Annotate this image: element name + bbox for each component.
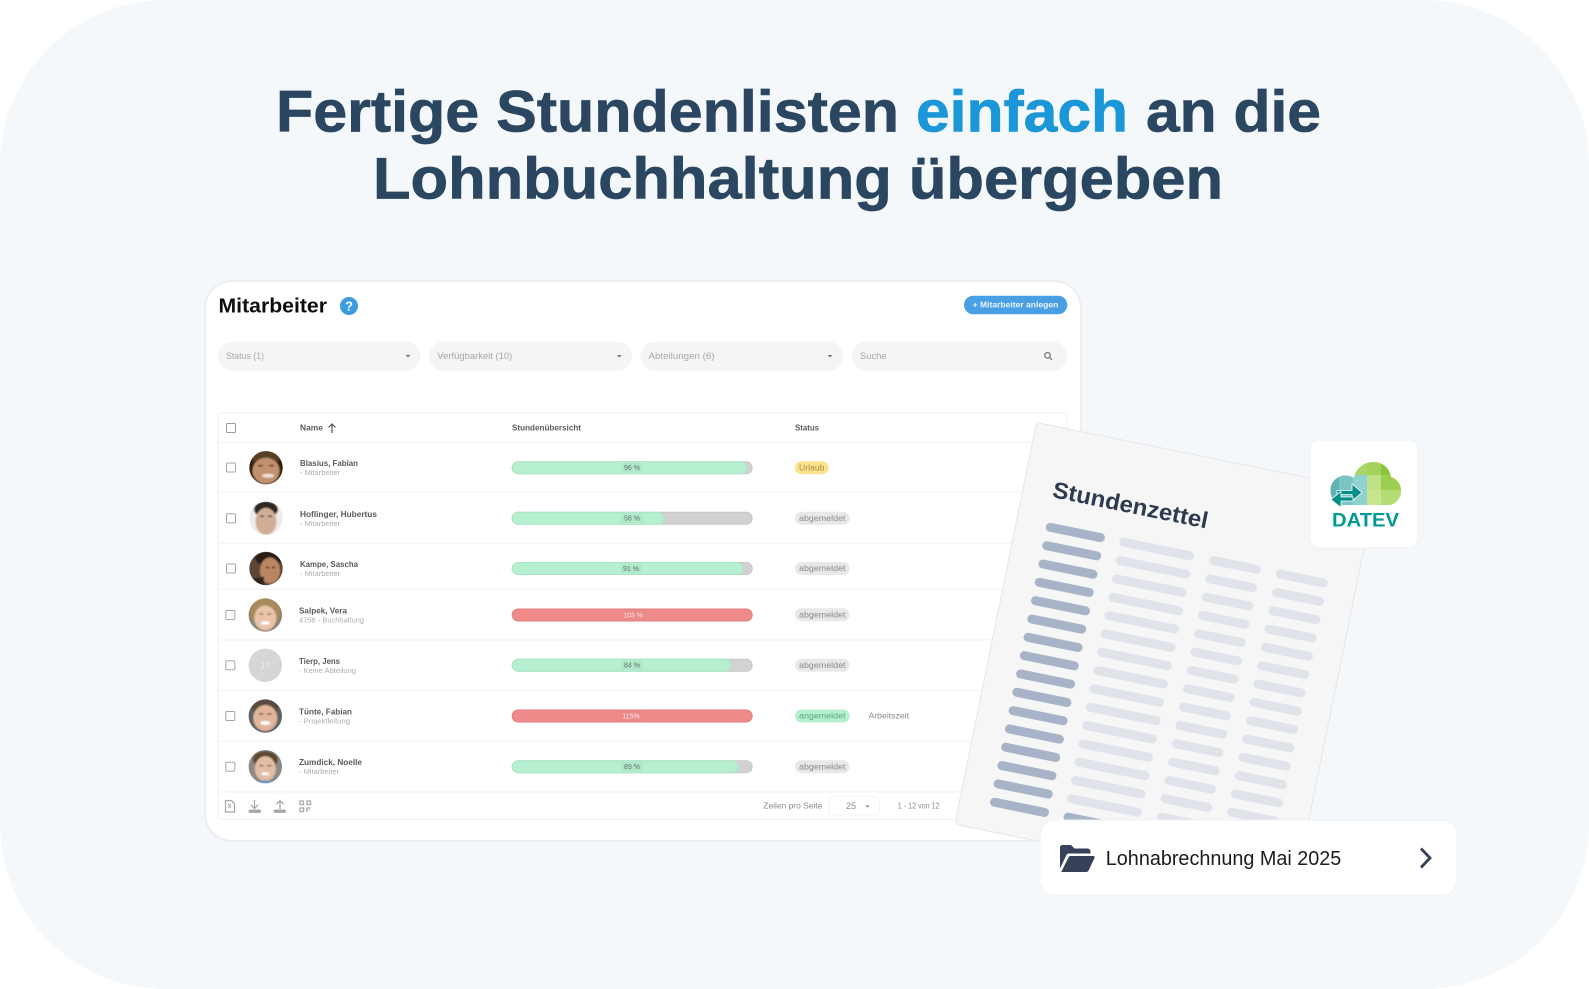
icon: DATEV cloud <box>1330 462 1401 507</box>
filter: Suche: Suche <box>860 351 887 361</box>
pagination: 25 <box>846 801 856 812</box>
row: Salpek, Vera: 4758 - Buchhaltung <box>299 618 364 624</box>
DATEV wordmark: DATEV <box>1332 511 1399 532</box>
icon: chevron <box>1421 848 1430 868</box>
row: Tierp, Jens: Tierp, Jens <box>299 657 341 666</box>
button: Mitarbeiter anlegen: + Mitarbeiter anlegen <box>973 300 1058 310</box>
name column bars <box>989 522 1106 818</box>
row: Blasius, Fabian: Blasius, Fabian <box>300 459 358 468</box>
filter: Verfügbarkeit <box>429 342 632 371</box>
row: Tünte, Fabian: 115% <box>622 713 640 720</box>
row: Zumdick, Noelle: abgemeldet <box>799 762 846 771</box>
row: Hoflinger, Hubertus: 58 % <box>624 516 640 523</box>
row: Blasius, Fabian: - Mitarbeiter <box>300 470 341 477</box>
avatar: Tierp initials: JT <box>260 661 271 672</box>
avatar: Salpek <box>248 598 282 632</box>
filter: Abteilungen <box>640 342 843 371</box>
row: Zumdick, Noelle: Zumdick, Noelle <box>299 758 363 767</box>
row: Hoflinger, Hubertus: Hoflinger, Hubertus <box>300 510 378 519</box>
icon: help <box>340 297 358 315</box>
row: Kampe, Sascha: Kampe, Sascha <box>300 560 359 569</box>
row: Salpek, Vera: 103 % <box>623 612 643 619</box>
card label: Lohnabrechnung Mai 2025 <box>1106 848 1341 870</box>
row: Zumdick, Noelle: 89 % <box>624 764 640 771</box>
row: Tünte, Fabian: - Projektleitung <box>299 718 350 726</box>
avatar: Tünte <box>248 699 282 733</box>
table header <box>226 424 820 433</box>
panel: Stundenzettel paper sheet <box>955 423 1376 893</box>
row: Salpek, Vera: Salpek, Vera <box>299 606 348 616</box>
avatar: Tierp initials <box>249 649 282 682</box>
row: Kampe, Sascha: 91 % <box>623 566 639 573</box>
avatar: Kampe <box>249 552 283 586</box>
title <box>276 80 1321 212</box>
row: Zumdick, Noelle <box>226 749 850 785</box>
fourth column bars <box>1226 569 1329 826</box>
filter: Verfügbarkeit: Verfügbarkeit (10) <box>437 351 512 361</box>
row: Tünte, Fabian <box>226 698 910 734</box>
title: an die <box>1146 80 1321 144</box>
row: Kampe, Sascha: abgemeldet <box>799 564 846 573</box>
table frame and row dividers <box>218 413 1067 819</box>
panel: DATEV logo card <box>1310 440 1418 548</box>
table header: Name <box>300 424 324 433</box>
panel: Lohnabrechnung folder card <box>1040 820 1457 895</box>
row: Tünte, Fabian: Arbeitszeit <box>868 712 910 721</box>
row: Hoflinger, Hubertus <box>226 500 850 536</box>
filter: Abteilungen: Abteilungen (6) <box>648 351 714 361</box>
row: Hoflinger, Hubertus: abgemeldet <box>799 514 846 523</box>
title: Fertige Stundenlisten <box>276 80 899 144</box>
row: Zumdick, Noelle: - Mitarbeiter <box>299 769 340 776</box>
row: Tierp, Jens: abgemeldet <box>799 661 846 670</box>
avatar: Zumdick <box>248 750 282 784</box>
row: Tünte, Fabian: angemeldet <box>799 712 846 721</box>
row: Tierp, Jens <box>226 649 850 682</box>
row: Salpek, Vera <box>226 597 850 633</box>
panel: Mitarbeiter table card <box>205 281 1081 841</box>
filter: Status <box>218 342 421 371</box>
filter: Suche <box>852 342 1067 371</box>
button: Mitarbeiter anlegen <box>964 296 1067 314</box>
table header: Status <box>795 424 820 433</box>
row: Kampe, Sascha <box>226 550 850 586</box>
table header: Stundenübersicht <box>512 424 581 433</box>
row: Tünte, Fabian: Tünte, Fabian <box>299 708 352 716</box>
sheet heading: Stundenzettel <box>1051 476 1211 533</box>
third column bars <box>1156 555 1262 831</box>
icon: help: ? <box>345 298 353 314</box>
title: einfach <box>916 80 1128 144</box>
table footer icons <box>226 800 310 813</box>
row: Blasius, Fabian <box>226 450 829 486</box>
pagination <box>763 797 940 815</box>
second column bars <box>1063 537 1195 836</box>
row: Blasius, Fabian: Urlaub <box>799 464 825 472</box>
icon: folder <box>1060 845 1095 872</box>
avatar: Hoflinger <box>250 502 282 535</box>
card heading: Mitarbeiter <box>218 296 327 318</box>
icon: exchange arrows <box>1331 484 1362 508</box>
title: Lohnbuchhaltung übergeben <box>373 146 1223 212</box>
row: Blasius, Fabian: 96 % <box>624 465 640 472</box>
avatar: Blasius <box>249 451 283 484</box>
row: Hoflinger, Hubertus: - Mitarbeiter <box>300 521 341 528</box>
row: Tierp, Jens: 84 % <box>624 663 640 670</box>
pagination: Zeilen pro Seite <box>763 801 823 810</box>
pagination: 1 - 12 von 12 <box>898 801 940 810</box>
row: Kampe, Sascha: - Mitarbeiter <box>300 571 341 578</box>
row: Tierp, Jens: - Keine Abteilung <box>299 668 356 675</box>
row: Salpek, Vera: abgemeldet <box>799 610 846 620</box>
filter: Status: Status (1) <box>226 351 264 361</box>
